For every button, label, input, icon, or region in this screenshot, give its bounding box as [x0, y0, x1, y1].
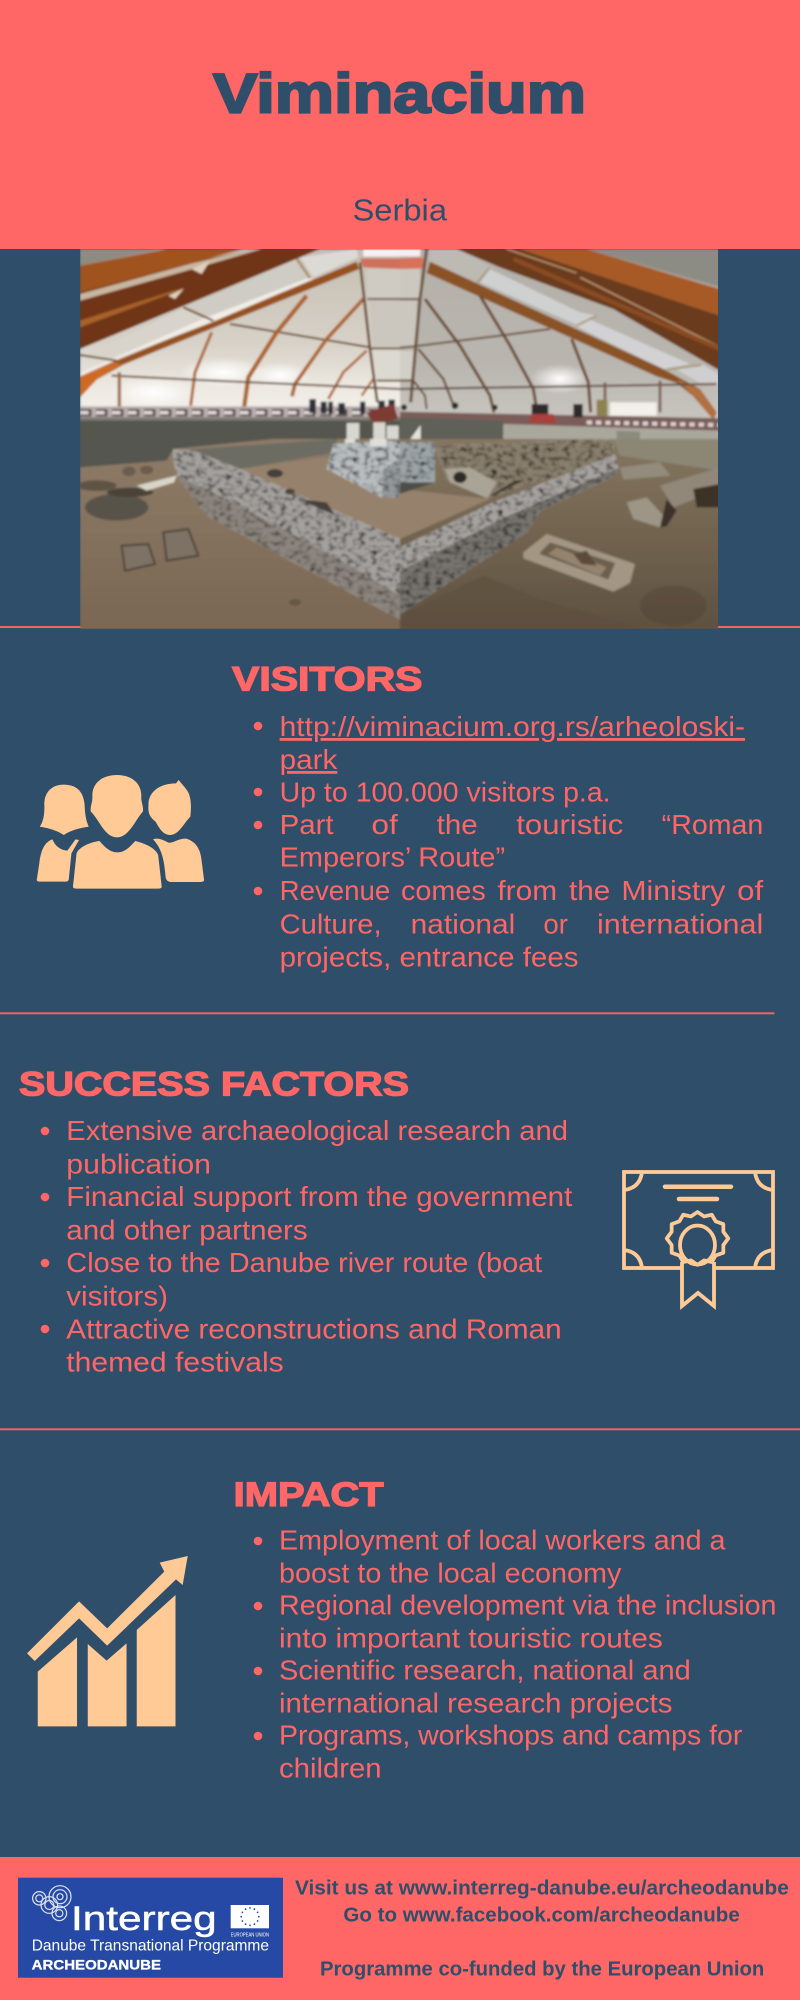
- panel: success factors: [19, 1065, 773, 1377]
- bullet list: visitors: national: [411, 908, 515, 939]
- bullet list: success factors: visitors): [66, 1280, 168, 1311]
- bullet list: success factors: [41, 1115, 573, 1377]
- bullet list: success factors: themed festivals: [66, 1346, 284, 1377]
- bullet list: visitors: Revenue: [280, 875, 390, 906]
- bullet list: visitors: “Roman: [662, 809, 763, 840]
- bullet list: visitors: of: [737, 875, 763, 906]
- bullet list: visitors: Up to 100.000 visitors p.a.: [280, 776, 611, 808]
- bullet list: visitors: the: [569, 875, 610, 906]
- panel: visitors: [37, 660, 763, 973]
- bullet list: success factors: Close to the Danube river route (boat: [66, 1247, 543, 1278]
- footer links text: [295, 1877, 789, 1981]
- logo: Interreg Danube Transnational Programme: [18, 1878, 283, 1978]
- logo: Interreg Danube Transnational Programme: Danube Transnational Programme: [32, 1938, 269, 1955]
- footer links text: Go to www.facebook.com/archeodanube: [343, 1905, 740, 1927]
- bullet list: visitors: comes: [401, 875, 486, 906]
- bullet list: visitors: Ministry: [621, 875, 725, 906]
- bullet list: impact: international research projects: [279, 1688, 672, 1719]
- bullet list: visitors: Part: [280, 809, 334, 840]
- bullet list: visitors: international: [597, 908, 763, 939]
- icon: group of people: [37, 775, 204, 889]
- icon: rising bar chart with arrow: [27, 1556, 188, 1726]
- bullet list: impact: children: [279, 1752, 382, 1783]
- bullet list: impact: into important touristic routes: [279, 1622, 663, 1653]
- bullet list: visitors: [254, 711, 763, 973]
- photo: lower right ground and ruins: [400, 439, 720, 629]
- icon: EU flag: EUROPEAN UNION: [231, 1933, 269, 1939]
- bullet list: impact: Scientific research, national and: [279, 1654, 691, 1685]
- bullet list: visitors: the: [437, 809, 478, 840]
- bullet list: success factors: publication: [66, 1148, 211, 1179]
- bullet list: success factors: Attractive reconstructions and Roman: [66, 1313, 562, 1344]
- heading: visitors: VISITORS: [232, 660, 422, 698]
- footer links text: Programme co-funded by the European Union: [320, 1959, 764, 1981]
- photo: Viminacium excavation hall: [77, 249, 720, 629]
- title: Viminacium: [213, 62, 586, 125]
- bullet list: impact: [254, 1524, 776, 1783]
- heading: impact: IMPACT: [234, 1476, 384, 1514]
- logo: Interreg Danube Transnational Programme: ARCHEODANUBE: [32, 1957, 161, 1972]
- header panel: [0, 0, 800, 249]
- bullet list: visitors: or: [543, 908, 568, 939]
- bullet list: visitors: from: [497, 875, 557, 906]
- icon: EU flag: [231, 1905, 269, 1939]
- icon: interreg spirals: [33, 1886, 71, 1921]
- divider under photo: [0, 626, 800, 628]
- bullet list: impact: Regional development via the inclusion: [279, 1590, 776, 1621]
- subtitle: Serbia: [352, 193, 448, 228]
- photo: lower left ground and stone wall: [77, 439, 401, 629]
- photo: upper right roof: [400, 249, 720, 439]
- bullet list: visitors: park: [280, 744, 338, 775]
- bullet list: visitors: http://viminacium.org.rs/arheoloski-: [280, 711, 745, 742]
- photo: upper left roof: [80, 249, 401, 439]
- heading: success factors: SUCCESS FACTORS: [19, 1065, 409, 1103]
- bullet list: impact: Programs, workshops and camps for: [279, 1719, 742, 1750]
- bullet list: visitors: touristic: [516, 809, 623, 840]
- bullet list: success factors: Financial support from the government: [66, 1181, 573, 1212]
- footer links text: Visit us at www.interreg-danube.eu/archeodanube: [295, 1877, 789, 1899]
- panel: impact: [27, 1476, 777, 1783]
- bullet list: visitors: projects, entrance fees: [280, 942, 579, 973]
- bullet list: visitors: Emperors’ Route”: [280, 842, 505, 873]
- logo: Interreg Danube Transnational Programme: Interreg: [71, 1900, 217, 1938]
- bullet list: impact: boost to the local economy: [279, 1557, 621, 1588]
- bullet list: visitors: Culture,: [280, 908, 382, 939]
- bullet list: visitors: of: [371, 809, 398, 840]
- bullet list: success factors: and other partners: [66, 1214, 308, 1245]
- footer panel: [0, 1857, 800, 2000]
- icon: certificate with seal: [624, 1172, 773, 1306]
- bullet list: impact: Employment of local workers and a: [279, 1524, 726, 1555]
- bullet list: success factors: Extensive archaeological research and: [66, 1115, 568, 1146]
